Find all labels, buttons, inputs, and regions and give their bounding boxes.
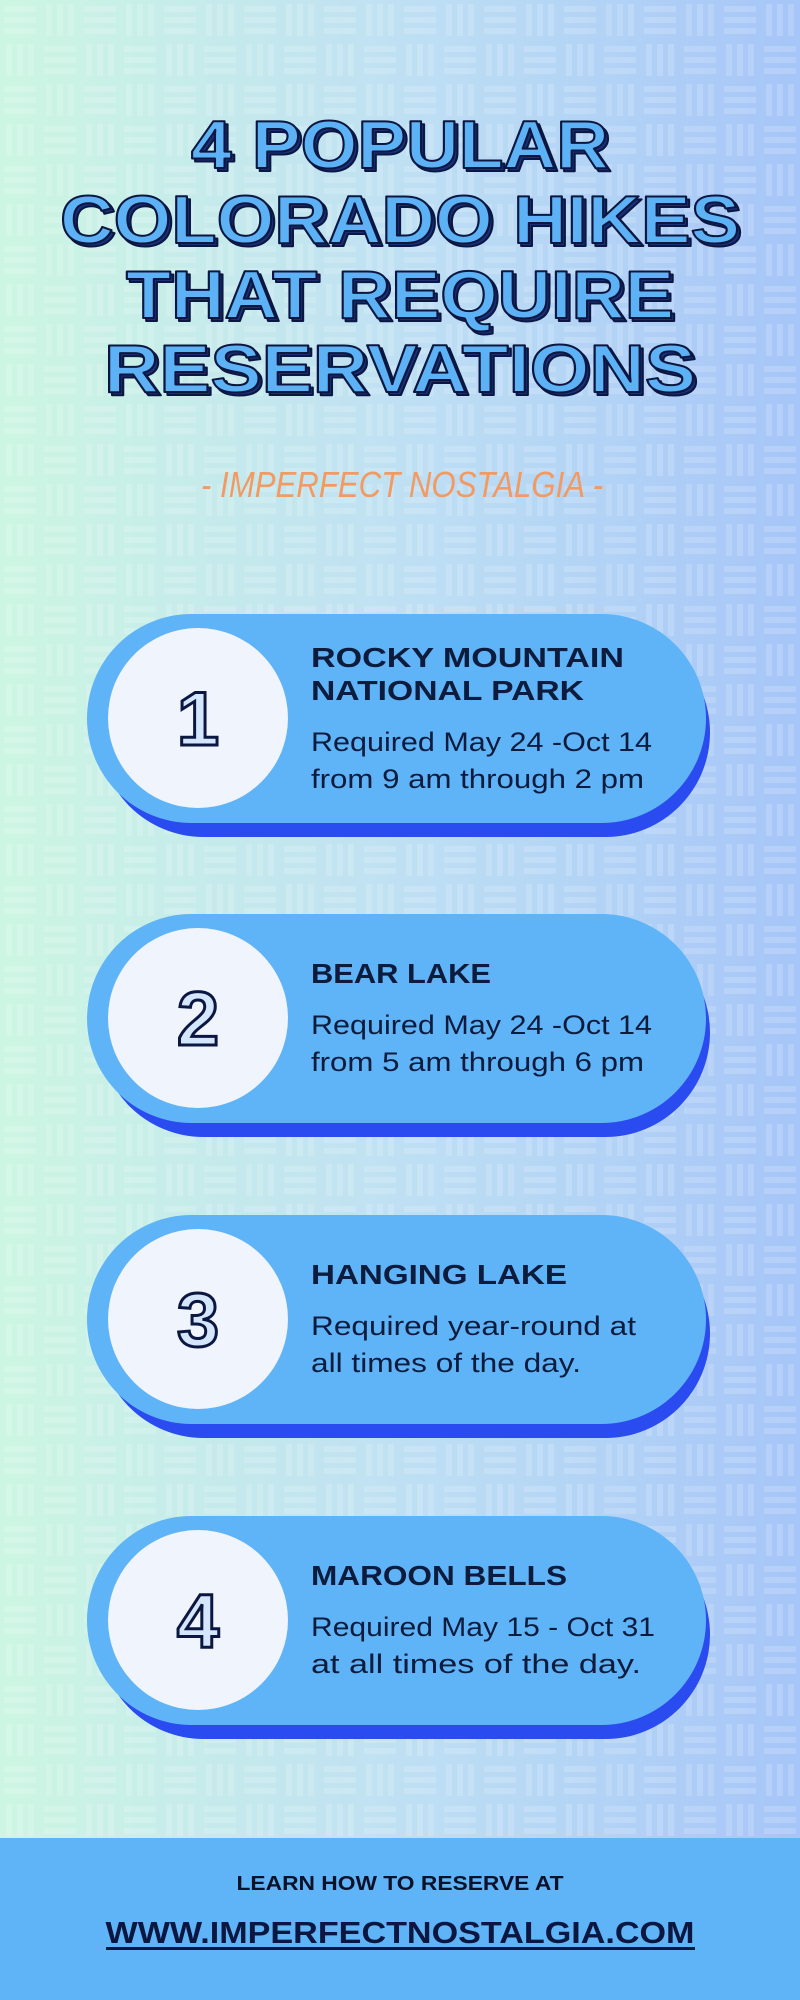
text: maroon bells: at all times of the day. — [311, 1649, 641, 1679]
footer — [0, 1838, 800, 2000]
title: COLORADO HIKES — [63, 185, 743, 261]
title — [60, 107, 743, 410]
text: hanging lake: all times of the day. — [311, 1348, 581, 1378]
text: bear lake — [311, 958, 652, 1077]
text: bear lake: BEAR LAKE — [311, 958, 491, 989]
title: 4 POPULAR — [191, 107, 609, 183]
icon: number 2 — [108, 928, 288, 1108]
panel: 1 rocky mountain — [87, 614, 710, 837]
panel: 3 hanging lake — [87, 1215, 710, 1438]
panel: 2 bear lake — [87, 914, 710, 1137]
icon: number 2: 2 — [177, 977, 219, 1062]
title: RESERVATIONS — [107, 334, 699, 410]
title: THAT REQUIRE — [129, 260, 677, 336]
title: COLORADO HIKES — [60, 182, 740, 258]
title: THAT REQUIRE — [126, 257, 674, 333]
footer text: learn how: LEARN HOW TO RESERVE AT — [236, 1873, 564, 1895]
text: maroon bells — [311, 1560, 655, 1679]
text: maroon bells: MAROON BELLS — [311, 1560, 567, 1591]
footer link: url: WWW.IMPERFECTNOSTALGIA.COM — [106, 1915, 694, 1950]
text: hanging lake — [311, 1259, 637, 1378]
text: hanging lake: Required year-round at — [311, 1311, 637, 1341]
icon: number 4 — [108, 1530, 288, 1710]
text: rocky mountain: from 9 am through 2 pm — [311, 764, 644, 794]
icon: number 3: 3 — [177, 1278, 219, 1363]
text: rocky mountain: ROCKY MOUNTAIN — [311, 642, 624, 673]
text: bear lake: Required May 24 -Oct 14 — [311, 1010, 652, 1040]
text: maroon bells: Required May 15 - Oct 31 — [311, 1612, 655, 1642]
title: 4 POPULAR — [194, 110, 612, 186]
icon: number 3 — [108, 1229, 288, 1409]
text: rocky mountain — [311, 642, 652, 794]
icon: number 4: 4 — [177, 1579, 219, 1664]
text: bear lake: from 5 am through 6 pm — [311, 1047, 644, 1077]
text: hanging lake: HANGING LAKE — [311, 1259, 567, 1290]
text: rocky mountain: NATIONAL PARK — [311, 675, 584, 706]
icon: number 1 — [108, 628, 288, 808]
icon: number 1: 1 — [177, 677, 219, 762]
title: RESERVATIONS — [104, 331, 696, 407]
panel: 4 maroon bells — [87, 1516, 710, 1739]
subtitle: - IMPERFECT NOSTALGIA - — [201, 464, 603, 505]
text: rocky mountain: Required May 24 -Oct 14 — [311, 727, 652, 757]
